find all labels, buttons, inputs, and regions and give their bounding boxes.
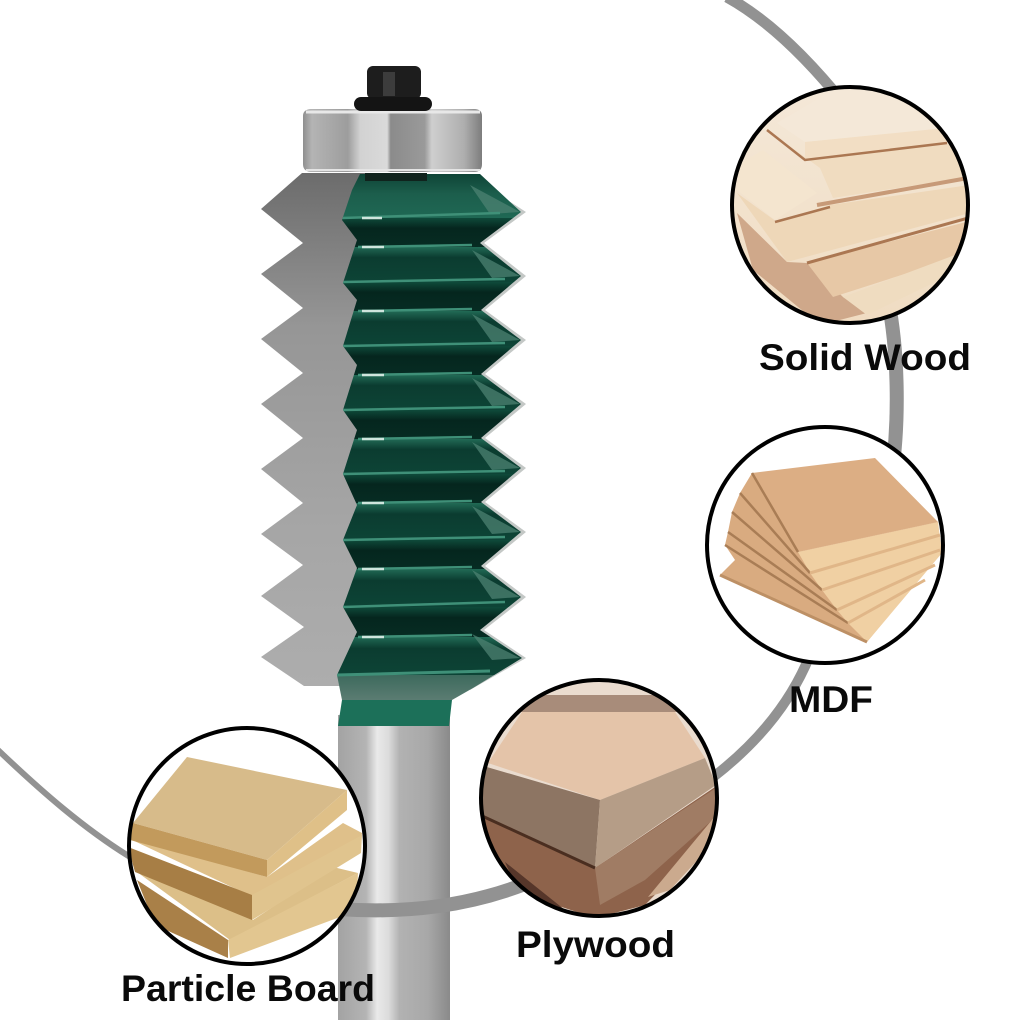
bolt	[354, 66, 432, 111]
green fluted body	[330, 170, 530, 726]
light ridges	[337, 213, 505, 675]
neck below flutes	[337, 675, 494, 700]
steel blade	[261, 173, 370, 686]
material: particle board	[128, 728, 365, 964]
bearing	[303, 109, 482, 172]
material: plywood	[480, 680, 718, 918]
decorative ring	[0, 0, 897, 910]
green collar	[338, 700, 452, 726]
material: MDF	[707, 427, 943, 663]
ridge highlights	[362, 218, 384, 637]
dark gap under bearing	[365, 173, 427, 181]
steel edge on right teeth	[470, 176, 526, 690]
label: particle board: Particle Board	[121, 968, 375, 1009]
router bit head	[261, 66, 530, 726]
router bit shank	[338, 715, 450, 1020]
glossy facets at right teeth	[470, 185, 520, 660]
label: plywood: Plywood	[516, 924, 675, 965]
label: MDF: MDF	[789, 679, 873, 720]
label: solid wood: Solid Wood	[759, 337, 971, 378]
material: solid wood	[732, 87, 970, 325]
